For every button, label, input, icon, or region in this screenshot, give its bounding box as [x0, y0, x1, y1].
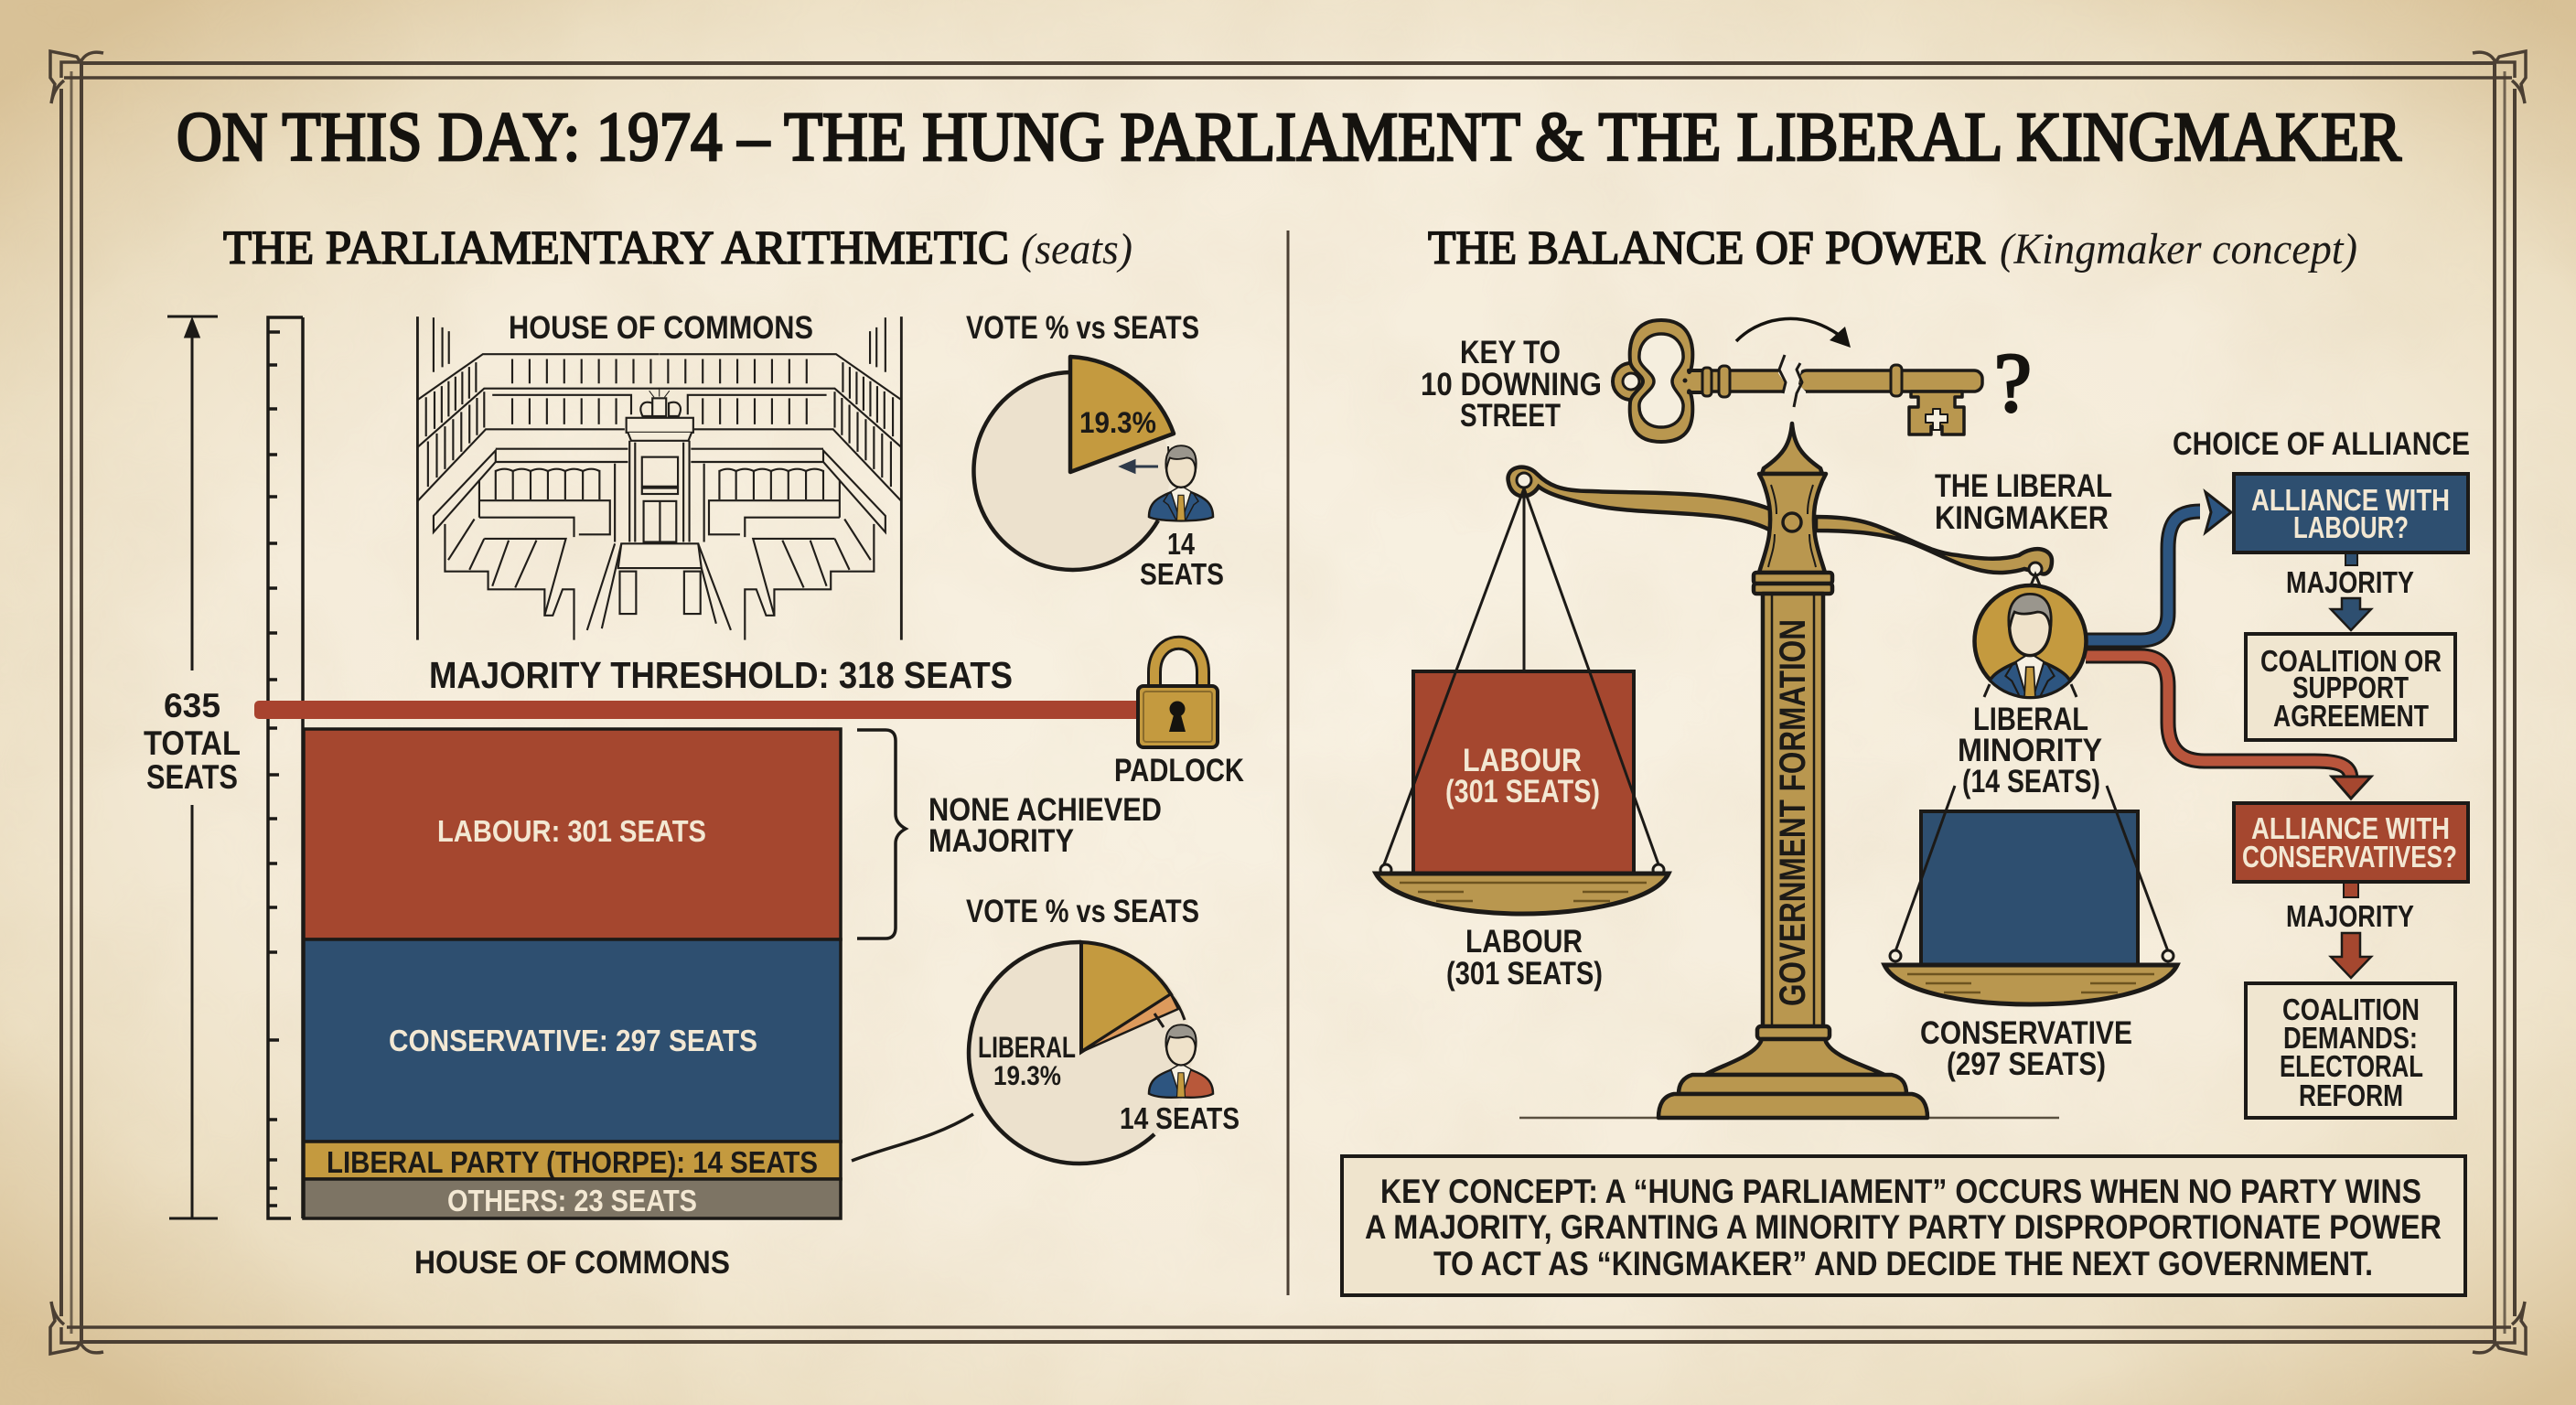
outcome: coalition demands electoral reform: DEMANDS: — [2283, 1021, 2418, 1055]
majority label labour: MAJORITY — [2286, 565, 2414, 599]
icon: liberal MP top — [1149, 445, 1213, 520]
column divider — [1286, 231, 1290, 1295]
key label: 10 DOWNING — [1421, 367, 1602, 402]
option: alliance with conservatives — [2234, 803, 2468, 897]
label: liberal minority: (14 SEATS) — [1962, 764, 2100, 799]
key concept box: A MAJORITY, GRANTING A MINORITY PARTY DISPROPORTIONATE POWER — [1365, 1208, 2442, 1246]
question mark: ? — [1994, 336, 2032, 429]
label: conservative: (297 SEATS) — [1947, 1046, 2106, 1082]
label: labour: LABOUR — [1465, 924, 1583, 960]
arc arrow over key — [1736, 318, 1851, 348]
outcome: coalition or support agreement: AGREEMENT — [2273, 699, 2429, 733]
bottom vote percent pie — [966, 894, 1199, 1164]
label: liberal minority: LIBERAL — [1973, 702, 2088, 737]
label: conservative: CONSERVATIVE — [1920, 1015, 2132, 1051]
chamber label: HOUSE OF COMMONS — [509, 310, 813, 346]
top pie seats label: SEATS — [1140, 557, 1224, 591]
alliance arrow to labour — [2086, 492, 2231, 640]
majority threshold label: MAJORITY THRESHOLD: 318 SEATS — [429, 654, 1013, 696]
majority label conservatives: MAJORITY — [2286, 899, 2414, 933]
icon: padlock — [1138, 643, 1218, 747]
medallion: liberal kingmaker — [1974, 574, 2086, 704]
bar: others — [304, 1179, 841, 1218]
label: the liberal kingmaker — [1935, 468, 2112, 536]
key concept box — [1342, 1156, 2465, 1295]
outcome: coalition demands electoral reform — [2246, 983, 2455, 1118]
option: alliance with labour — [2234, 474, 2468, 565]
beam left arm — [1508, 467, 1771, 531]
pillar text: GOVERNMENT FORMATION — [1773, 619, 1813, 1006]
arrow down red — [2331, 933, 2371, 978]
label: the liberal kingmaker: KINGMAKER — [1935, 500, 2109, 536]
choice of alliance heading: CHOICE OF ALLIANCE — [2173, 426, 2470, 462]
title: ON THIS DAY: 1974 – THE HUNG PARLIAMENT & THE LIBERAL KINGMAKER — [177, 99, 2401, 176]
brace label: MAJORITY — [928, 823, 1074, 859]
icon: liberal MP bottom, two-tone suit — [1149, 1024, 1213, 1098]
label: labour — [1446, 924, 1603, 992]
bottom vote percent pie: VOTE % vs SEATS — [966, 894, 1199, 929]
key label: KEY TO — [1460, 335, 1561, 370]
bottom vote percent pie: LIBERAL — [978, 1031, 1076, 1064]
option: alliance with conservatives: ALLIANCE WITH — [2251, 811, 2450, 845]
left pan with labour block: (301 SEATS) — [1445, 774, 1600, 810]
outcome: coalition or support agreement: COALITION OR — [2260, 644, 2442, 678]
bar: conservative — [304, 939, 841, 1142]
ground line — [1519, 1117, 2059, 1119]
top vote percent pie — [966, 310, 1199, 570]
section heading: balance of power: (Kingmaker concept) — [2000, 225, 2357, 273]
beam right arm — [1816, 517, 2052, 574]
total seats label: SEATS — [146, 758, 238, 796]
total seats label — [144, 687, 241, 796]
brace label: NONE ACHIEVED — [928, 792, 1162, 828]
bottom vote percent pie: 19.3% — [993, 1061, 1061, 1091]
top pie seats label: 14 — [1167, 527, 1196, 561]
left pan with labour block — [1376, 488, 1669, 914]
bar: others: OTHERS: 23 SEATS — [447, 1184, 697, 1217]
padlock label: PADLOCK — [1114, 753, 1244, 788]
left pan with labour block: LABOUR — [1463, 743, 1582, 778]
bar: liberal: LIBERAL PARTY (THORPE): 14 SEATS — [327, 1145, 818, 1179]
speaker chair — [587, 388, 731, 630]
house of commons chamber illustration — [417, 316, 901, 640]
scale: balance — [1376, 424, 2177, 1118]
brace label — [928, 792, 1162, 859]
stacked bar chart — [304, 729, 841, 1218]
bar: conservative: CONSERVATIVE: 297 SEATS — [389, 1024, 757, 1057]
callout line — [852, 1114, 973, 1161]
label: labour: (301 SEATS) — [1446, 956, 1603, 992]
outcome: coalition demands electoral reform: ELECTORAL — [2280, 1049, 2423, 1083]
section heading: balance of power — [1428, 222, 2357, 274]
label: conservative — [1920, 1015, 2132, 1082]
bar: labour — [304, 729, 841, 939]
bar: labour: LABOUR: 301 SEATS — [437, 814, 706, 848]
brace: none achieved majority — [857, 730, 906, 938]
alliance arrow to conservatives — [2086, 656, 2371, 799]
section heading: arithmetic: (seats) — [1021, 225, 1132, 273]
outcome: coalition or support agreement: SUPPORT — [2292, 670, 2409, 704]
section heading: arithmetic: THE PARLIAMENTARY ARITHMETIC — [223, 222, 1009, 274]
key concept box: KEY CONCEPT: A “HUNG PARLIAMENT” OCCURS WHEN NO PARTY WINS — [1380, 1173, 2421, 1210]
outcome: coalition demands electoral reform: REFORM — [2299, 1078, 2403, 1112]
option: alliance with conservatives: CONSERVATIVES? — [2242, 840, 2457, 874]
outcome: coalition demands electoral reform: COALITION — [2282, 992, 2420, 1026]
section heading: balance of power: THE BALANCE OF POWER — [1428, 222, 1985, 274]
option: alliance with labour: ALLIANCE WITH — [2251, 483, 2450, 517]
label: liberal minority: MINORITY — [1958, 733, 2102, 768]
panel: balance of power — [1342, 222, 2470, 1295]
label: liberal minority — [1958, 702, 2102, 799]
panel: parliamentary arithmetic — [144, 222, 1244, 1281]
chart caption: HOUSE OF COMMONS — [414, 1245, 730, 1281]
outcome: coalition or support agreement — [2246, 634, 2455, 740]
option: alliance with labour: LABOUR? — [2293, 510, 2409, 544]
top vote percent pie: VOTE % vs SEATS — [966, 310, 1199, 346]
majority threshold line — [254, 701, 1142, 719]
label: the liberal kingmaker: THE LIBERAL — [1935, 468, 2112, 504]
right pan with conservative block — [1884, 786, 2177, 1004]
key concept box: TO ACT AS “KINGMAKER” AND DECIDE THE NEXT GOVERNMENT. — [1433, 1245, 2373, 1282]
total seats label: 635 — [164, 687, 220, 724]
bottom pie seats label: 14 SEATS — [1120, 1101, 1240, 1135]
icon: broken key — [1613, 320, 1982, 442]
total seats arrow — [167, 316, 218, 1218]
top pie seats label — [1140, 527, 1224, 591]
seat ruler — [268, 317, 303, 1218]
total seats label: TOTAL — [144, 724, 241, 762]
top vote percent pie: 19.3% — [1079, 406, 1156, 439]
arrow down blue — [2331, 598, 2371, 630]
key label — [1421, 335, 1602, 434]
key label: STREET — [1460, 398, 1561, 434]
pillar — [1658, 424, 1927, 1118]
